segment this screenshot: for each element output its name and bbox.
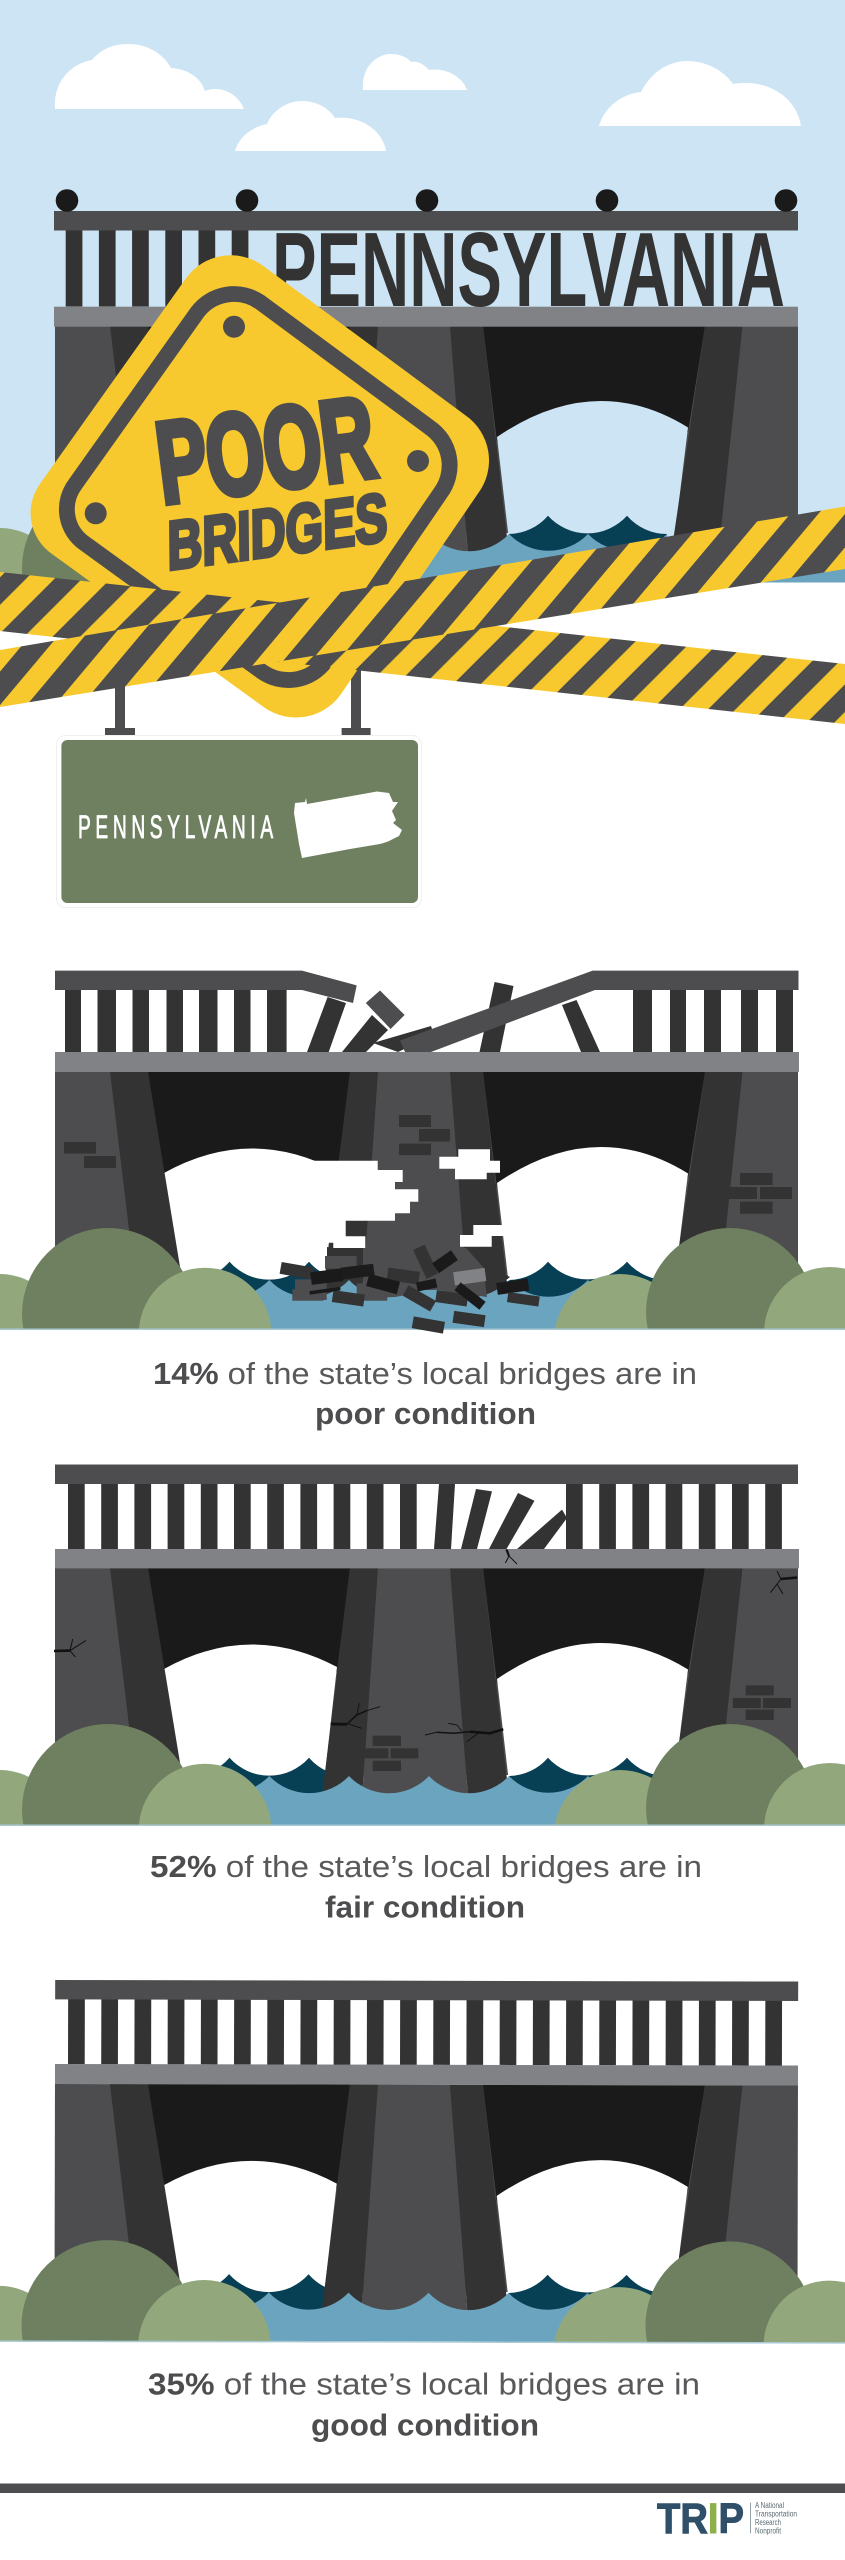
logo divider: [750, 2502, 751, 2534]
sign posts: [105, 640, 371, 736]
logo tagline: A National: [755, 2501, 784, 2510]
sign label: PENNSYLVANIA: [78, 809, 278, 845]
caption line 1: 14% of the state’s local bridges are in: [153, 1356, 697, 1391]
poor bridge broken balusters: [307, 982, 600, 1052]
good bridge piers and arches: [54, 2084, 798, 2318]
good bridge river: [189, 2292, 667, 2342]
hero top rail: [54, 211, 798, 230]
poor bridge collapsed pier gaps: [307, 1149, 507, 1266]
poor bridge broken left rail: [55, 971, 357, 1003]
logo tagline: Research: [755, 2518, 781, 2527]
caption: 14% poor condition: [153, 1356, 697, 1431]
caption line 1: 35% of the state’s local bridges are in: [148, 2367, 700, 2402]
fair condition bridge: [0, 1464, 845, 1916]
caution tape: descending strip: [0, 572, 845, 724]
hero bridge river: [190, 534, 845, 583]
good bridge balusters: [68, 2032, 782, 2033]
sign bolts: [85, 316, 429, 524]
good bridge deck: [55, 2064, 798, 2086]
poor condition bridge: [0, 971, 845, 1420]
fair bridge bricks: [363, 1685, 791, 1771]
fair bridge river: [190, 1776, 667, 1824]
good bridge trees: [0, 2240, 845, 2434]
caption line 2: good condition: [311, 2408, 539, 2443]
fair bridge right balusters: [566, 1484, 782, 1549]
poor bridge piers and arches: [55, 1072, 798, 1304]
caption: 35% good condition: [148, 2367, 700, 2443]
fair bridge deck: [55, 1549, 799, 1568]
fair bridge top rail: [55, 1464, 798, 1484]
sign plate: [31, 255, 489, 718]
poor bridge left balusters: [65, 990, 287, 1052]
logo tagline: [755, 2501, 797, 2536]
logo tagline: Transportation: [755, 2510, 797, 2518]
poor bridge broken hammer-shaped block: [366, 990, 405, 1029]
poor bridge right balusters: [633, 990, 793, 1052]
sign inner ring: [67, 294, 450, 680]
poor bridge deck: [55, 1052, 799, 1072]
good bridge top rail: [55, 1980, 798, 2001]
hero deck: [54, 307, 798, 327]
poor bridge broken right rail: [400, 971, 798, 1052]
hero bridge with Pennsylvania railing: [0, 189, 845, 732]
fair bridge piers and arches: [55, 1568, 798, 1800]
caption: 52% fair condition: [150, 1849, 702, 1925]
yellow diamond sign: Poor Bridges: [31, 255, 489, 718]
background: sky: [0, 0, 845, 583]
poor bridge rubble pile: [280, 1245, 540, 1334]
logo tagline: Nonprofit: [755, 2526, 782, 2536]
logo wordmark: TRIP: [657, 2495, 744, 2543]
clouds: [55, 44, 801, 151]
footer bar: [0, 2484, 845, 2493]
hero left trees: [0, 482, 194, 654]
caption line 2: fair condition: [325, 1890, 525, 1925]
hero rail knobs: [56, 189, 797, 212]
sign text BRIDGES: BRIDGES: [167, 479, 388, 585]
hero bridge piers and arches: [55, 326, 798, 558]
caution tape: rising strip: [0, 506, 845, 707]
good condition bridge: [0, 1980, 845, 2434]
TRIP logo: [657, 2495, 797, 2543]
sign text POOR: POOR: [149, 373, 382, 528]
fair bridge left balusters: [68, 1484, 417, 1549]
caption line 1: 52% of the state’s local bridges are in: [150, 1849, 702, 1884]
state outline of Pennsylvania: [294, 792, 402, 858]
hero balusters: [66, 230, 248, 306]
fair bridge trees: [0, 1724, 845, 1916]
poor bridge trees: [0, 1228, 845, 1420]
sign panel: [61, 740, 418, 903]
poor bridge bricks: [64, 1115, 792, 1214]
sign border: [56, 736, 422, 908]
fair bridge cracks: [54, 1550, 797, 1742]
poor bridge river: [190, 1280, 667, 1328]
fair bridge tilted balusters: [434, 1484, 567, 1549]
green highway sign: [56, 736, 422, 908]
caption line 2: poor condition: [315, 1396, 536, 1431]
white ground: [0, 582, 845, 732]
